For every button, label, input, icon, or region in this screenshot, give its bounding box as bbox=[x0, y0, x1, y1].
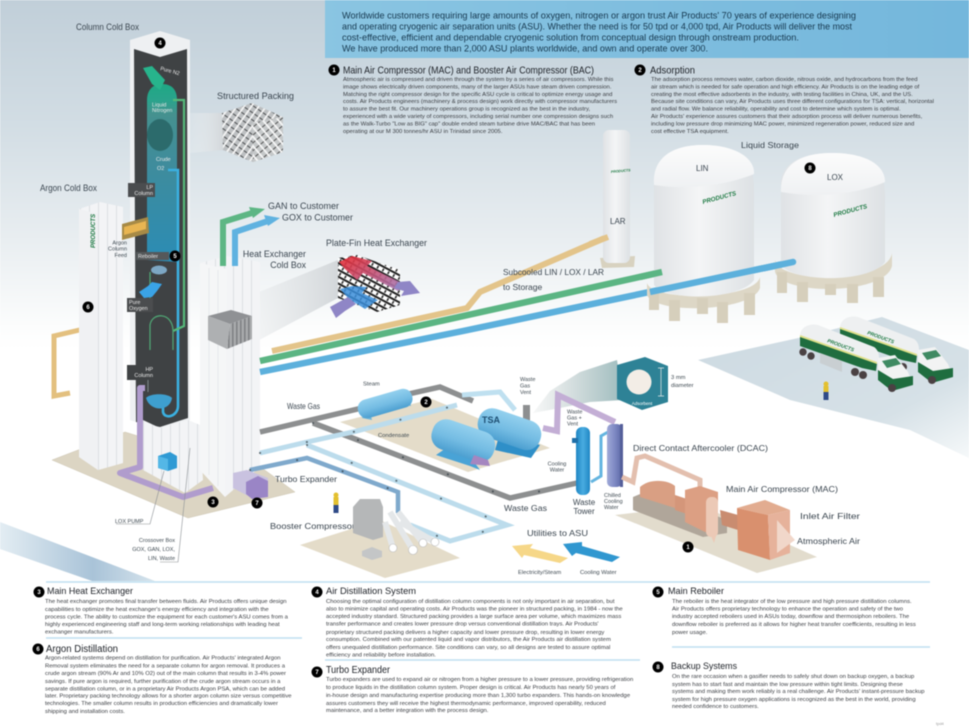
label: GAN: GAN to Customer bbox=[268, 201, 339, 211]
projection to structured packing bbox=[190, 113, 223, 153]
section: main air compressor text: Main Air Compressor (MAC) and Booster Air Compressor (BAC) bbox=[343, 64, 594, 76]
label: booster compressor: Booster Compressor bbox=[270, 521, 355, 531]
label: waste gas vent upper: Waste bbox=[520, 377, 535, 383]
section: argon distillation: separate distillation column, or in a proprietary Air Products Argon PSA, which can be added bbox=[45, 686, 285, 692]
section: air distillation system: transfer performance and creates lower pressure drop versus conventional distillation trays. Air Products' bbox=[326, 622, 599, 628]
header intro text: cost-effective, efficient and dependable cryogenic solution from conceptual design through onstream production. bbox=[342, 32, 799, 44]
label: waste gas upper: Waste Gas bbox=[287, 401, 320, 411]
section: adsorption text bbox=[634, 64, 936, 135]
section: backup systems: 8 bbox=[656, 665, 660, 671]
section: air distillation system: Air Distillation System bbox=[326, 586, 416, 597]
section: turbo expander bbox=[312, 665, 635, 714]
LOX pipe overlay bbox=[650, 262, 793, 292]
section: air distillation system bbox=[312, 586, 624, 658]
heater vessel bbox=[356, 387, 415, 420]
argon transfer pipe bbox=[122, 217, 149, 240]
heat exchanger cold box bbox=[200, 256, 260, 497]
label: argon column feed: Column bbox=[108, 246, 127, 252]
section: argon distillation: 6 bbox=[36, 647, 40, 653]
LIN pipe overlay bbox=[640, 272, 662, 277]
waste gas pipe upper bbox=[260, 387, 473, 432]
section: main air compressor text bbox=[328, 64, 619, 135]
equipment base platform bbox=[52, 432, 295, 518]
badge 1 bbox=[682, 542, 694, 552]
tag: reboiler bbox=[136, 252, 169, 260]
label: liquid nitrogen: Nitrogen bbox=[152, 108, 172, 114]
section: adsorption text: Air Products' experience assures customers that their adsorption process will deliver numerous benefits, bbox=[651, 114, 923, 120]
argon cold box bbox=[79, 202, 127, 470]
section: argon distillation: Removal system eliminates the need for a separate column for argon removal. It produces a bbox=[45, 664, 286, 670]
label: crude O2: O2 bbox=[157, 166, 164, 172]
badge 6 bbox=[82, 302, 94, 312]
section: adsorption text: 2 bbox=[638, 68, 642, 74]
label: structured packing: Structured Packing bbox=[217, 91, 294, 101]
section: adsorption text: The adsorption process removes water, carbon dioxide, nitrous oxide, and hydrocarbons from the feed bbox=[651, 77, 918, 83]
booster platform bbox=[300, 520, 460, 578]
booster compressor machine bbox=[353, 499, 439, 560]
section: air distillation system: accepted industry standard. Structured packing provides a large surface area per volume, which maximizes mass bbox=[326, 614, 621, 620]
label: liquid nitrogen: Liquid bbox=[152, 102, 166, 108]
section: backup systems: system has to start fast and maintain the low pressure within tight limits. Designing these bbox=[672, 682, 904, 688]
header intro text bbox=[342, 10, 856, 54]
badge 2: 2 bbox=[424, 400, 428, 406]
section: air distillation system: offers unequaled distillation performance. Site conditions can vary, so all designs are tested to assure optimal bbox=[326, 645, 610, 651]
label: waste gas vent upper: Gas bbox=[520, 384, 530, 390]
section: adsorption text: cost effective TSA equipment. bbox=[651, 129, 729, 135]
section: argon distillation: savings. If pure argon is required, further purification of the crude argon stream occurs in a bbox=[45, 679, 281, 685]
person: truck yard bbox=[824, 382, 828, 400]
tag: pure oxygen bbox=[127, 298, 153, 312]
section: turbo expander: in-house design and manufacturing expertise producing more than 1,300 turbo expanders. This hands-on knowledge bbox=[326, 693, 631, 699]
section: main air compressor text: Atmospheric air is compressed and driven through the system by a series of air compressors. While this bbox=[343, 77, 613, 83]
pipe: subcooled LOX bbox=[260, 262, 793, 372]
vent stack bbox=[523, 405, 530, 421]
tag: LP column: Column bbox=[134, 191, 153, 197]
truck front: PRODUCTS bbox=[826, 338, 855, 354]
label: waste gas vent upper: Vent bbox=[520, 390, 531, 396]
label: adsorbent: Adsorbent bbox=[632, 401, 653, 406]
section: main reboiler: power usage. bbox=[672, 630, 708, 636]
label: waste gas vent lower: Waste bbox=[567, 410, 582, 416]
adsorbent detail hexagon bbox=[617, 357, 668, 410]
section: argon distillation: crude argon stream (90% Ar and 10% O2) out of the main column that results in 3-4% power bbox=[45, 671, 286, 677]
header intro text: and operating cryogenic air separation units (ASU). Whether the need is for 50 tpd or 4,000 tpd, Air Products will deliver the most bbox=[342, 22, 852, 32]
section: main air compressor text: operating at our M 300 tonnes/hr ASU in Trinidad since 2005. bbox=[343, 129, 503, 135]
section: main heat exchanger: exchanger manufacturers. bbox=[45, 630, 114, 636]
badge 5: 5 bbox=[173, 254, 177, 260]
purple air pipe over TSA bbox=[543, 395, 615, 431]
badge 5 bbox=[170, 250, 180, 262]
section: turbo expander: Turbo expanders are used to expand air or nitrogen from a higher pressure to a lower pressure, providing refrigeration bbox=[326, 677, 633, 683]
section: main reboiler: downflow reboiler is preferred as it allows for higher heat transfer coefficients, resulting in less bbox=[672, 622, 916, 628]
section: adsorption text: including low pressure drop minimizing MAC power, minimized regeneration power, reduced size and bbox=[651, 122, 914, 128]
label: heat exchanger cold box: Cold Box bbox=[270, 260, 307, 270]
GAN pipe bbox=[223, 213, 252, 266]
label: TSA: TSA bbox=[482, 415, 501, 425]
column cold box bbox=[127, 31, 190, 430]
liquid oxygen spray bbox=[139, 282, 162, 298]
LIN tank bbox=[654, 145, 754, 296]
section: main heat exchanger: The heat exchanger promotes final transfer between fluids. Air Products offers unique design bbox=[45, 599, 287, 605]
badge 7 bbox=[252, 498, 262, 508]
label: steam: Steam bbox=[363, 382, 380, 388]
LOX tank base bbox=[775, 253, 892, 303]
label: adsorbent diameter: 3 mm bbox=[671, 375, 686, 381]
section: air distillation system: efficiency and reliability before installation. bbox=[326, 652, 436, 658]
section: argon distillation: Argon Distillation bbox=[46, 644, 118, 655]
leader lines: pump and crossover bbox=[116, 448, 190, 562]
tag: HP column: HP bbox=[146, 367, 153, 373]
badge 1: 1 bbox=[686, 545, 690, 551]
purple air pipe to column bbox=[120, 388, 213, 497]
label: inlet air filter: Inlet Air Filter bbox=[800, 511, 860, 521]
label: pure N2: Pure N2 bbox=[159, 66, 180, 77]
utility arrow: cooling water bbox=[563, 542, 620, 562]
badge 2 bbox=[420, 396, 432, 408]
section: main reboiler: Air Products offers proprietary technology to enhance the operation and safety of the two bbox=[672, 606, 904, 612]
label: MAC: Main Air Compressor (MAC) bbox=[726, 484, 838, 494]
label: cooling water: Cooling bbox=[548, 462, 566, 468]
label: LAR: LAR bbox=[610, 217, 626, 226]
label: to storage: to Storage bbox=[503, 282, 542, 292]
chilled water pipe bbox=[591, 432, 608, 482]
truck rear: PRODUCTS bbox=[866, 330, 895, 346]
section: air distillation system: consumption. Combined with our patented liquid and vapor distributors, the Air Products air distillation system bbox=[326, 637, 611, 643]
section: backup systems: needed confidence to customers. bbox=[672, 704, 759, 710]
label: atmospheric air: Atmospheric Air bbox=[797, 536, 860, 546]
section: adsorption text: Adsorption bbox=[650, 64, 695, 76]
DCAC to MAC pipe bbox=[622, 456, 700, 488]
section: main air compressor text: as the Walk-Turbo "Low as BIG" cap" double ended steam turbine drive MAC/BAC that has been bbox=[343, 122, 595, 128]
section: air distillation system: 4 bbox=[315, 590, 319, 596]
green internal pipe bbox=[173, 100, 184, 331]
pipe: subcooled LIN bbox=[260, 272, 662, 361]
utility arrow: electricity/steam bbox=[512, 544, 568, 563]
decorative ground stripe bbox=[0, 522, 155, 581]
section: turbo expander: maintenance, and a better integration with the process design. bbox=[326, 708, 489, 714]
section: main heat exchanger bbox=[34, 586, 290, 636]
section: main heat exchanger: Main Heat Exchanger bbox=[47, 586, 133, 597]
label: crossover box: Crossover Box bbox=[139, 538, 175, 544]
label: cooling water: Water bbox=[550, 468, 564, 474]
plate-fin exchanger bbox=[330, 255, 420, 318]
waste gas pipe lower bbox=[313, 423, 577, 498]
tan stub repaint bbox=[590, 237, 608, 244]
label: crude O2: Crude bbox=[156, 157, 171, 163]
dimension marks bbox=[658, 368, 664, 396]
section: main reboiler: industry accepted reboilers used in ASUs today, downflow and thermosiphon reboilers. The bbox=[672, 614, 910, 620]
purple outlet arrow bbox=[394, 281, 420, 296]
section: main air compressor text: Matching the right compressor design for the specific ASU cycle is critical to optimize energy usage and bbox=[343, 92, 612, 98]
HP column sump bbox=[146, 394, 172, 408]
green lower arc bbox=[150, 316, 173, 350]
label: waste tower: Tower bbox=[573, 507, 595, 516]
label: plate-fin heat exchanger: Plate-Fin Heat Exchanger bbox=[326, 238, 427, 248]
section: turbo expander: to produce liquids in the distillation column system. Proper design is critical. Air Products has nearly 50 years of bbox=[326, 685, 616, 691]
section: air distillation system: proprietary structured packing delivers a higher capacity and lower pressure drop, resulting in lower energy bbox=[326, 630, 604, 636]
tag: HP column: Column bbox=[134, 373, 153, 379]
label: column cold box: Column Cold Box bbox=[76, 22, 139, 32]
badge 6: 6 bbox=[86, 305, 90, 311]
section: turbo expander: assures customers they will receive the highest thermodynamic performance, improved operability, reduced bbox=[326, 701, 606, 707]
truck rear bbox=[839, 317, 953, 384]
tag: reboiler: Reboiler bbox=[138, 254, 158, 260]
person: booster bbox=[334, 492, 338, 513]
LOX tank bbox=[781, 153, 885, 278]
badge 3 bbox=[208, 496, 218, 508]
section: backup systems: On the rare occasion when a gasifier needs to safely shut down on backup oxygen, a backup bbox=[672, 674, 915, 680]
section: argon distillation: technologies. The smaller column results in production efficiencies and dramatically lower bbox=[45, 701, 278, 707]
tag: LP column bbox=[128, 183, 155, 197]
tag: pure oxygen: Pure bbox=[129, 300, 140, 306]
section: argon distillation: shipping and installation costs. bbox=[45, 709, 125, 715]
cold stream arrow bbox=[340, 286, 378, 309]
label: LOX pump: LOX PUMP bbox=[115, 519, 144, 525]
section: argon distillation: Argon-related systems depend on distillation for purification. Air Products' integrated Argon bbox=[45, 656, 281, 662]
section: air distillation system: also to minimize capital and operating costs. Air Products was the pioneer in structured packing, in 1984 - now the bbox=[326, 606, 623, 612]
badge 3: 3 bbox=[211, 500, 215, 506]
label: subcooled: Subcooled LIN / LOX / LAR bbox=[503, 267, 604, 277]
section: main air compressor text: image shows electrically driven components, many of the larger ASUs have steam driven compression. bbox=[343, 84, 612, 90]
label: electricity/steam: Electricity/Steam bbox=[518, 570, 561, 576]
MAC platform bbox=[615, 505, 817, 573]
GAN arrow head bbox=[249, 207, 265, 218]
section: main air compressor text: to assure the best fit. Our machinery operations group is recognized as the best in the industry, bbox=[343, 106, 590, 112]
GOX arrow head bbox=[264, 215, 280, 226]
section: turbo expander: 7 bbox=[315, 670, 319, 676]
argon pipe: tan loop bbox=[54, 328, 88, 396]
blue internal pipe bbox=[163, 170, 178, 416]
structured packing zone bbox=[147, 119, 173, 151]
LOX pump bbox=[158, 452, 177, 471]
header intro text: Worldwide customers requiring large amounts of oxygen, nitrogen or argon trust Air Products' 70 years of experience designing bbox=[342, 10, 856, 22]
label: crossover box: LIN, Waste bbox=[148, 556, 175, 562]
section: backup systems: system for high pressure oxygen applications is recognized as the best in the world, providing bbox=[672, 697, 916, 703]
badge 8: 8 bbox=[808, 166, 812, 172]
label: argon cold box: Argon Cold Box bbox=[40, 183, 97, 193]
section: main heat exchanger: process cycle. The ability to customize the equipment for each customer's ASU comes from a bbox=[45, 614, 289, 620]
structured packing cube bbox=[222, 103, 283, 162]
header banner bbox=[325, 0, 969, 58]
pure N2 outlet bbox=[143, 66, 165, 90]
label: chilled cooling water: Cooling bbox=[604, 499, 623, 505]
atmospheric air arrow bbox=[777, 520, 795, 553]
hot stream arrow bbox=[339, 256, 404, 291]
turbo expander unit bbox=[233, 470, 268, 499]
utilities heading: Utilities to ASU bbox=[527, 528, 588, 538]
label: GOX: GOX to Customer bbox=[282, 212, 353, 222]
label: waste tower: Waste bbox=[573, 498, 596, 507]
LIN tank base bbox=[647, 277, 760, 323]
logo: LIN: PRODUCTS bbox=[702, 190, 738, 206]
tag: LP column: LP bbox=[146, 185, 153, 191]
section: argon distillation: later. Proprietary packing technology allows for a shorter argon column size versus competitive bbox=[45, 694, 292, 700]
label: cooling water utility: Cooling Water bbox=[580, 570, 617, 576]
section: adsorption text: Because site conditions can vary, Air Products uses three different configurations for TSA: vertical, horizontal bbox=[651, 99, 934, 105]
MAC machinery bbox=[633, 481, 795, 560]
truck yard ground bbox=[698, 317, 969, 458]
section: main heat exchanger: 3 bbox=[37, 590, 41, 596]
badge 4 bbox=[154, 38, 166, 48]
waste tower bbox=[572, 427, 590, 495]
label: LOX: LOX bbox=[827, 173, 844, 182]
label: waste gas vent lower: Gas + bbox=[567, 416, 582, 422]
section: argon distillation bbox=[32, 644, 293, 715]
truck front bbox=[799, 325, 913, 392]
label: argon column feed: Feed bbox=[114, 253, 127, 259]
label: waste gas lower: Waste Gas bbox=[504, 503, 547, 513]
label: chilled cooling water: Water bbox=[604, 505, 619, 511]
section: main reboiler bbox=[652, 586, 917, 636]
label: liquid storage: Liquid Storage bbox=[741, 140, 799, 150]
label: condensate: Condensate bbox=[378, 433, 409, 439]
steel blue pipe bbox=[250, 458, 398, 513]
section: backup systems: Backup Systems bbox=[671, 661, 737, 672]
label: chilled cooling water: Chilled bbox=[604, 493, 621, 499]
DCAC column bbox=[607, 424, 623, 487]
badge 4: 4 bbox=[158, 41, 162, 47]
header intro text: We have produced more than 2,000 ASU plants worldwide, and own and operate over 300. bbox=[342, 44, 708, 54]
label: turbo expander: Turbo Expander bbox=[275, 474, 337, 484]
section: main reboiler: Main Reboiler bbox=[668, 586, 724, 597]
section: main heat exchanger: capabilities to optimize the heat exchanger's energy efficiency and integration with the bbox=[45, 607, 269, 613]
section: main heat exchanger: highly experienced engineering staff and long-term working relationships with leading heat bbox=[45, 622, 280, 628]
purple inlet arrow bbox=[330, 297, 356, 318]
column interior dark panel bbox=[134, 49, 188, 427]
section: main air compressor text: costs. Air Products engineers (machinery & process design) work directly with compressor manufacturers bbox=[343, 99, 617, 105]
section: adsorption text: air stream which is needed for safe operation and high efficiency. Air Products is on the leading edge of bbox=[651, 84, 920, 90]
section: main reboiler: The reboiler is the heat integrator of the low pressure and high pressure distillation columns. bbox=[672, 599, 912, 605]
footer mark: tpd4 bbox=[936, 721, 945, 726]
distillation column vessel bbox=[147, 84, 177, 262]
section: main air compressor text: 1 bbox=[332, 68, 336, 74]
tag: HP column bbox=[127, 365, 154, 380]
badge 8 bbox=[804, 162, 816, 174]
section: turbo expander: Turbo Expander bbox=[326, 665, 391, 676]
projection to plate-fin exchanger bbox=[207, 260, 338, 345]
section: backup systems: systems and making them work reliably is a real challenge. Air Products' instant-pressure backup bbox=[672, 689, 925, 695]
logo: argon box: PRODUCTS bbox=[91, 214, 97, 248]
logo: LAR: PRODUCTS bbox=[611, 168, 631, 174]
section: adsorption text: creating the most effective adsorbents in the industry, with testing facilities in China, UK, and the US. bbox=[651, 92, 913, 98]
logo: LOX: PRODUCTS bbox=[833, 203, 869, 219]
tag: pure oxygen: Oxygen bbox=[129, 306, 148, 312]
crossover box bbox=[143, 420, 203, 493]
section: air distillation system: Choosing the optimal configuration of distillation column components is not only important in air separation, but bbox=[326, 599, 615, 605]
label: crossover box: GOX, GAN, LOX, bbox=[132, 547, 175, 553]
GOX pipe bbox=[235, 221, 268, 266]
section: backup systems bbox=[652, 661, 926, 710]
LAR tank bbox=[600, 130, 635, 268]
LOX re-draw pipe end bbox=[765, 262, 793, 268]
badge 7: 7 bbox=[255, 501, 259, 507]
label: DCAC: Direct Contact Aftercooler (DCAC) bbox=[633, 443, 768, 453]
label: LIN: LIN bbox=[696, 164, 709, 173]
label: adsorbent diameter: diameter bbox=[671, 383, 694, 389]
label: waste gas vent lower: Vent bbox=[567, 422, 578, 428]
section: main air compressor text: experienced with a wide variety of compressors, including serial number one compression designs such bbox=[343, 114, 613, 120]
label: argon column feed: Argon bbox=[112, 240, 127, 246]
section: main reboiler: 5 bbox=[656, 590, 660, 596]
projection to adsorbent detail bbox=[533, 360, 623, 413]
reboiler bbox=[151, 266, 167, 274]
pipe: subcooled LAR bbox=[272, 237, 607, 351]
inlet air filter bbox=[737, 500, 790, 560]
internal exchanger core bbox=[208, 310, 252, 349]
TSA platform bbox=[340, 399, 550, 472]
TSA vessels bbox=[428, 404, 545, 470]
section: adsorption text: and radial flow. We balance reliability, operability and cost to determine which system is optimal. bbox=[651, 106, 901, 112]
light blue pipes bbox=[260, 405, 507, 541]
label: heat exchanger cold box: Heat Exchanger bbox=[243, 249, 306, 259]
